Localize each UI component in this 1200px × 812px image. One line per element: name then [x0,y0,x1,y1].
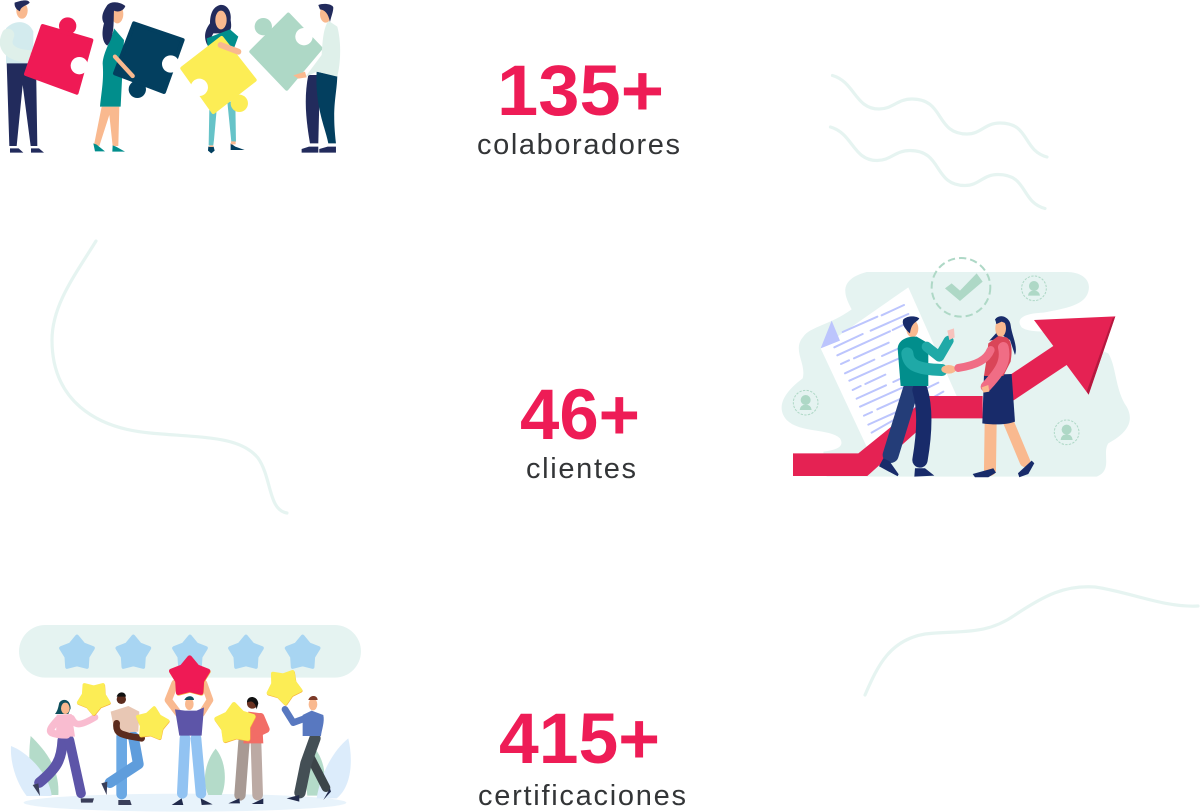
illustration: people holding rating stars [11,625,361,812]
label: colaboradores [477,129,680,161]
yellow star [136,707,169,739]
illustration: handshake and growth arrow [782,258,1130,477]
dashed check badge [932,258,990,317]
red puzzle piece [59,17,76,35]
woman in pink sweater [958,316,1034,477]
user icon bottom right [1054,420,1079,445]
user icon left [793,390,818,415]
stat: 415+ certificaciones [478,700,686,812]
red growth arrow [793,396,983,476]
mint puzzle piece [255,18,272,35]
user icon top right [1022,276,1046,301]
man in teal sweater [879,316,956,477]
number: 135+ [497,52,664,131]
leaves [11,736,351,798]
man in blue with star [267,671,331,802]
stat: 135+ colaboradores [477,52,680,161]
woman in coral with star [216,697,266,804]
stat: 46+ clientes [520,376,640,485]
person 1 with red puzzle piece [6,0,91,153]
illustration: team holding puzzle pieces [6,0,340,153]
man in beige with star [101,692,169,805]
decorative waves, top right [830,76,1047,208]
yellow star [79,686,109,714]
decorative curve, bottom right [865,587,1198,695]
woman in pink with star [33,685,109,803]
yellow star [267,672,302,705]
navy puzzle piece [129,81,146,98]
number: 415+ [499,700,660,779]
decorative curve, left [52,241,287,513]
yellow puzzle piece [231,95,248,112]
person 4 with mint puzzle piece [251,4,340,153]
document [821,287,957,447]
five blue stars [61,637,318,667]
red star [172,658,208,693]
person 3 with yellow puzzle piece [182,5,255,153]
man lifting red star [168,658,213,805]
ground ellipse [24,794,346,812]
rating bar [19,625,361,678]
yellow star [216,704,255,741]
label: clientes [526,453,636,485]
mint background blob [782,272,1130,477]
label: certificaciones [478,780,686,812]
person 2 with navy puzzle piece [93,2,183,152]
number: 46+ [520,376,640,455]
